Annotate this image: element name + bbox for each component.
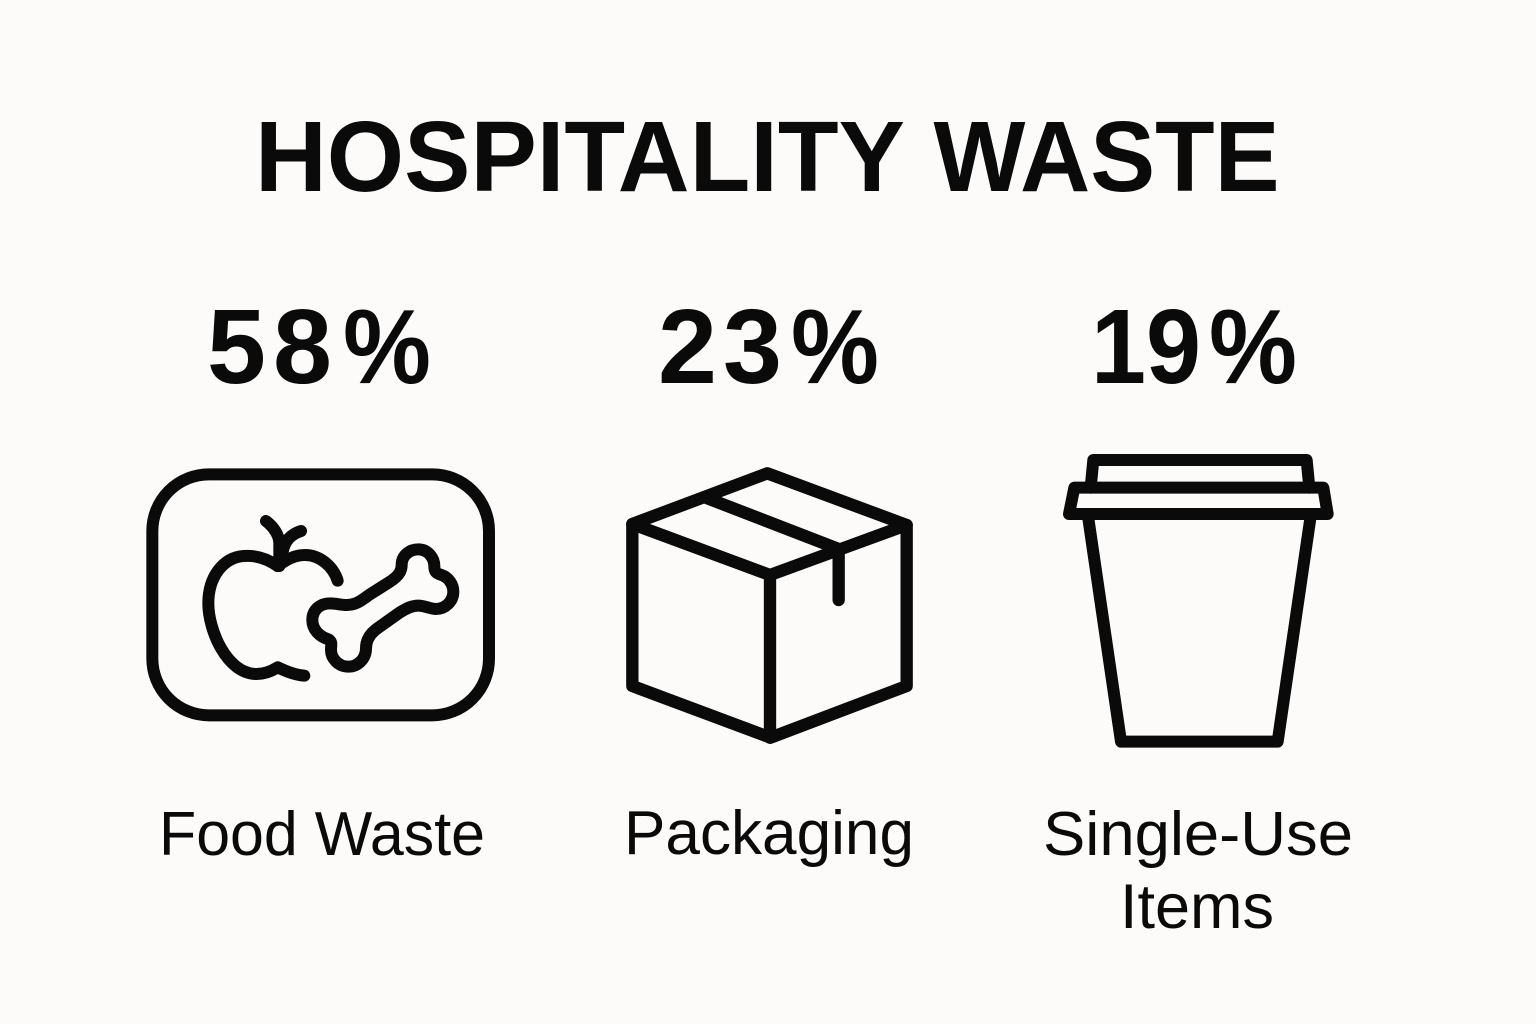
title xyxy=(255,101,1280,213)
label: single-use items: Items xyxy=(1120,872,1274,942)
icon: cardboard box xyxy=(632,473,907,738)
stat: packaging 23%: 23 xyxy=(658,288,782,406)
stat: single-use items 19%: 19 xyxy=(1091,288,1201,406)
label: single-use items: Single-Use xyxy=(1043,800,1353,869)
title: WASTE xyxy=(934,101,1280,213)
stat: packaging 23%: % xyxy=(791,288,879,406)
icon: food waste tray with apple and bone xyxy=(152,474,489,715)
stat: food waste 58%: 58 xyxy=(207,288,332,406)
stat: food waste 58%: % xyxy=(343,288,431,406)
label: packaging: Packaging xyxy=(624,799,914,868)
label: single-use items xyxy=(1043,800,1353,942)
stat: single-use items 19% xyxy=(1091,288,1297,406)
stat: packaging 23% xyxy=(658,288,879,406)
label: food waste: Food Waste xyxy=(159,800,485,869)
title: HOSPITALITY xyxy=(255,101,905,213)
stat: food waste 58% xyxy=(207,288,431,406)
icon: disposable cup with lid xyxy=(1069,460,1328,742)
stat: single-use items 19%: % xyxy=(1209,288,1297,406)
